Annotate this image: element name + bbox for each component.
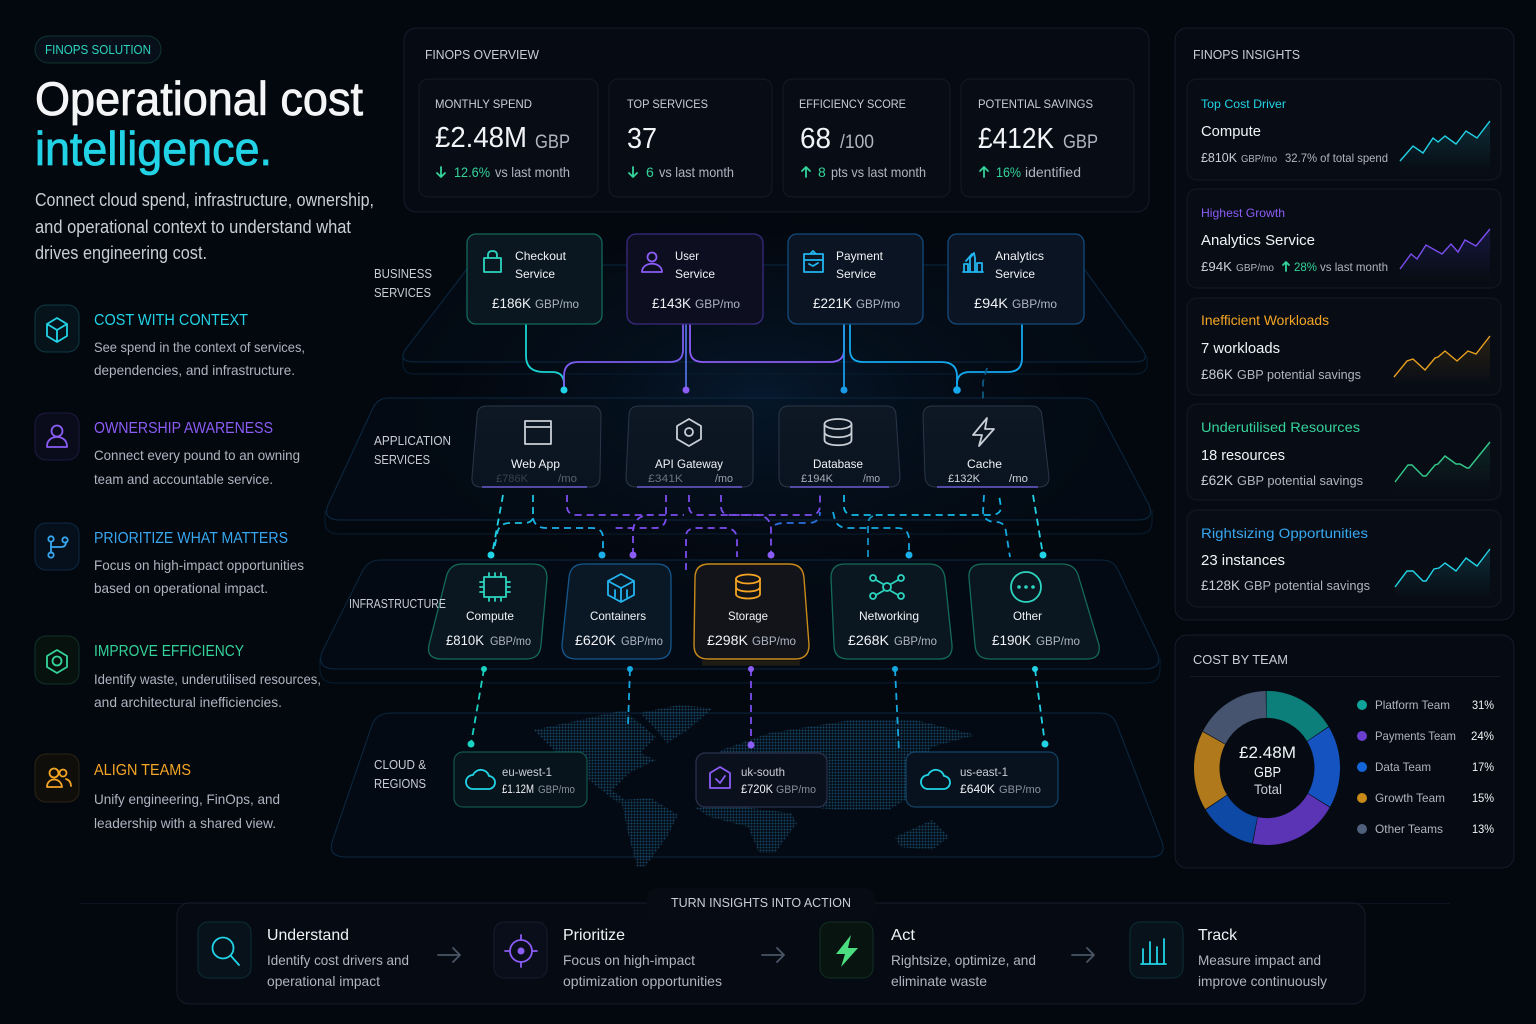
service card: user: £143K [652,295,692,311]
insight: inefficient workloads [1187,298,1501,395]
service card: user: GBP/mo [695,297,740,311]
kpi: top services: TOP SERVICES [627,97,708,111]
feature: prioritize what matters: based on operational impact. [94,580,268,596]
kpi: monthly spend: vs last month [495,164,570,180]
region card: uk-south: GBP/mo [776,784,816,796]
action heading pill: TURN INSIGHTS INTO ACTION [671,895,851,910]
feature: prioritize what matters: PRIORITIZE WHAT MATTERS [94,530,288,547]
infrastructure card: other: £190K [992,632,1032,648]
feature: improve efficiency: and architectural inefficiencies. [94,694,282,710]
infrastructure card: other: GBP/mo [1036,634,1080,648]
insight: inefficient workloads: 7 workloads [1201,340,1280,357]
infrastructure card: containers: Containers [590,609,646,623]
donut legend: 31% [1472,698,1494,712]
insight: top cost driver: GBP/mo [1241,153,1277,165]
platform: infrastructure layer [320,560,1160,683]
kpi: potential savings: identified [1025,164,1081,180]
infrastructure card: containers: GBP/mo [621,634,663,648]
application card: web app: /mo [558,473,577,485]
application card: cache [923,406,1049,487]
application card: api gateway: £341K [648,473,684,485]
kpi: potential savings: 16% [996,164,1021,180]
insight: rightsizing opportunities: £128K [1201,577,1241,593]
infrastructure card: networking: Networking [859,609,919,623]
infrastructure card: containers: £620K [575,632,617,648]
feature: align teams [35,754,280,831]
header: badge, title and intro: Connect cloud spend, infrastructure, ownership, [35,190,374,210]
insight: highest growth [1187,189,1501,288]
infrastructure card: other: Other [1013,609,1042,623]
step: track: improve continuously [1198,973,1327,989]
region card: uk-south [696,753,827,807]
layer labels: APPLICATION [374,434,451,448]
infrastructure card: storage [694,564,809,663]
region card: us-east-1: £640K [960,782,995,796]
application card: cache: /mo [1009,473,1028,485]
application card: database: Database [813,457,863,471]
service card: checkout: £186K [492,295,532,311]
infrastructure card: storage: Storage [728,609,768,623]
step: act [820,922,1036,989]
donut legend: Data Team [1375,760,1431,774]
service card: checkout [467,234,602,324]
service card: payment [788,234,923,324]
infrastructure card: other [969,564,1099,659]
platform: business services layer [403,265,1147,374]
step: understand: operational impact [267,973,380,989]
step: prioritize: optimization opportunities [563,973,722,989]
layer labels: BUSINESS [374,267,432,281]
insight: underutilised resources: 18 resources [1201,447,1285,464]
panel: cost by team [1175,635,1514,868]
arrow [1072,948,1094,962]
step: prioritize: Prioritize [563,927,625,944]
feature: improve efficiency: Identify waste, underutilised resources, [94,671,321,687]
infrastructure card: compute: Compute [466,609,514,623]
feature: align teams: leadership with a shared view. [94,815,276,831]
feature: align teams: ALIGN TEAMS [94,762,191,779]
infrastructure card: containers [562,564,671,659]
feature: ownership awareness: Connect every pound to an owning [94,447,300,463]
insight: inefficient workloads: GBP potential savings [1237,367,1361,382]
region card: us-east-1: us-east-1 [960,765,1008,779]
feature: ownership awareness: team and accountable service. [94,471,273,487]
arrow [438,948,460,962]
panel: cost by team: COST BY TEAM [1193,652,1288,667]
layer labels: CLOUD & [374,758,427,772]
platform: application services layer [325,398,1152,534]
application card: database [779,406,900,487]
application card: web app [472,406,601,487]
insight: highest growth: vs last month [1320,260,1388,274]
insight: highest growth: £94K [1201,259,1232,274]
step: prioritize [494,922,722,989]
kpi: top services: 6 [646,164,654,180]
service card: user: User [675,249,699,263]
application card: web app: Web App [511,457,560,471]
kpi: monthly spend: 12.6% [454,164,490,180]
step: act: Act [891,927,916,944]
donut centre total [1239,743,1296,797]
infrastructure card: storage: £298K [707,632,749,648]
insight: top cost driver: £810K [1201,150,1237,165]
step: prioritize: Focus on high-impact [563,952,695,968]
platform: cloud and regions layer [331,713,1163,857]
region card: us-east-1 [906,752,1058,807]
service card: analytics: Service [995,267,1035,281]
layer labels: REGIONS [374,777,426,791]
insight: top cost driver: Compute [1201,123,1261,140]
header: badge, title and intro [35,36,374,263]
infrastructure card: compute: GBP/mo [490,634,531,648]
kpi: efficiency score: pts vs last month [831,164,926,180]
donut legend: Other Teams [1375,822,1443,836]
region card: eu-west-1 [454,752,587,807]
feature: prioritize what matters [35,523,304,596]
insight: underutilised resources: GBP potential savings [1237,473,1363,488]
region card: eu-west-1: GBP/mo [538,784,575,796]
kpi: potential savings: GBP [1063,132,1098,153]
step: understand: Identify cost drivers and [267,952,409,968]
header: badge, title and intro: and operational context to understand what [35,217,351,237]
insight: rightsizing opportunities: GBP potential savings [1244,578,1370,593]
infrastructure card: networking: £268K [848,632,890,648]
service card: analytics: £94K [974,295,1009,311]
kpi: efficiency score: 8 [818,164,826,180]
donut legend: 13% [1472,822,1494,836]
insight: highest growth: 28% [1294,260,1317,274]
step: understand [198,922,409,989]
application card: cache: £132K [948,473,981,485]
infrastructure card: storage: GBP/mo [752,634,796,648]
insight: top cost driver: 32.7% of total spend [1285,151,1388,165]
application card: database: £194K [801,473,834,485]
infrastructure card: networking: GBP/mo [894,634,937,648]
step: understand: Understand [267,927,349,944]
service card: analytics: Analytics [995,249,1044,263]
service card: checkout: Checkout [515,249,567,263]
kpi: potential savings: £412K [978,123,1055,155]
header: badge, title and intro: drives engineering cost. [35,243,207,263]
kpi: monthly spend: GBP [535,132,570,153]
donut legend: Growth Team [1375,791,1445,805]
feature: improve efficiency: IMPROVE EFFICIENCY [94,643,244,660]
feature: improve efficiency [35,636,321,710]
panel: finops insights [1175,28,1514,620]
kpi: potential savings: POTENTIAL SAVINGS [978,97,1093,111]
feature: prioritize what matters: Focus on high-impact opportunities [94,557,304,573]
arrow [762,948,784,962]
step: track: Measure impact and [1198,952,1321,968]
region card: uk-south: £720K [741,782,773,796]
action bar: turn insights into action [177,888,1365,1004]
insight: inefficient workloads: £86K [1201,366,1234,382]
feature: ownership awareness: OWNERSHIP AWARENESS [94,420,273,437]
service card: analytics: GBP/mo [1012,297,1057,311]
kpi: monthly spend: MONTHLY SPEND [435,97,532,111]
layer labels: INFRASTRUCTURE [349,597,446,611]
connectors: business to application [526,325,1022,403]
kpi: efficiency score: /100 [840,132,874,153]
kpi: monthly spend [419,79,598,197]
panel: finops insights: FINOPS INSIGHTS [1193,47,1300,62]
donut centre total: Total [1254,781,1282,797]
feature: cost with context: See spend in the context of services, [94,339,305,355]
service card: payment: Payment [836,249,884,263]
layer labels: SERVICES [374,453,430,467]
application card: api gateway: /mo [715,473,733,485]
kpi: top services: 37 [627,123,657,155]
region card: us-east-1: GBP/mo [999,784,1041,796]
donut centre total: GBP [1254,764,1281,781]
application card: api gateway: API Gateway [655,457,723,471]
kpi: top services: vs last month [659,164,734,180]
step: act: Rightsize, optimize, and [891,952,1036,968]
feature: cost with context: COST WITH CONTEXT [94,312,248,329]
infrastructure card: compute: £810K [446,632,485,648]
kpi: top services [609,79,772,197]
action heading pill [647,888,875,920]
region card: uk-south: uk-south [741,765,785,779]
donut legend: 15% [1472,791,1494,805]
insight: underutilised resources: Underutilised Resources [1201,419,1360,435]
insight: inefficient workloads: Inefficient Workloads [1201,312,1329,328]
feature: ownership awareness [35,413,300,487]
step: track [1130,922,1327,989]
header: badge, title and intro: FINOPS SOLUTION [45,42,151,57]
application card: database: /mo [863,473,880,485]
insight: highest growth: GBP/mo [1236,262,1274,274]
application card: cache: Cache [967,457,1002,471]
insight: underutilised resources [1187,404,1501,500]
layer labels [349,267,451,791]
service card: checkout: GBP/mo [535,297,579,311]
kpi: potential savings [961,79,1134,197]
insight: underutilised resources: £62K [1201,472,1234,488]
kpi: efficiency score: EFFICIENCY SCORE [799,97,906,111]
insight: rightsizing opportunities [1187,510,1501,607]
feature: cost with context: dependencies, and infrastructure. [94,362,295,378]
header: badge, title and intro: Operational cost [35,72,363,125]
world map [534,705,976,867]
insight: top cost driver [1187,79,1501,180]
insight: highest growth: Highest Growth [1201,206,1285,220]
kpi: monthly spend: £2.48M [435,122,527,154]
donut legend: Platform Team [1375,698,1450,712]
feature: align teams: Unify engineering, FinOps, and [94,791,280,807]
insight: top cost driver: Top Cost Driver [1201,97,1286,111]
service card: payment: GBP/mo [856,297,900,311]
insight: highest growth: Analytics Service [1201,232,1315,249]
service card: payment: Service [836,267,876,281]
feature: cost with context [35,305,305,378]
application card: api gateway [626,406,753,487]
service card: analytics [948,234,1084,324]
panel: finops overview [404,28,1149,212]
kpi: efficiency score [783,79,950,197]
service card: user [627,234,763,324]
donut chart [1207,704,1327,832]
service card: user: Service [675,267,715,281]
infrastructure card: networking [831,564,952,659]
kpi: efficiency score: 68 [800,123,831,155]
application card: web app: £786K [496,473,529,485]
donut legend [1357,698,1494,836]
insight: rightsizing opportunities: 23 instances [1201,552,1285,569]
step: act: eliminate waste [891,973,987,989]
donut legend: Payments Team [1375,729,1456,743]
insight: rightsizing opportunities: Rightsizing Opportunities [1201,525,1368,541]
header: badge, title and intro: intelligence. [35,122,272,175]
region card: eu-west-1: £1.12M [502,782,534,796]
donut legend: 17% [1472,760,1494,774]
service card: payment: £221K [813,295,853,311]
donut legend: 24% [1471,729,1494,743]
service card: checkout: Service [515,267,555,281]
panel: finops overview: FINOPS OVERVIEW [425,47,540,62]
connectors: infrastructure to regions [468,666,1048,752]
connectors: application to infrastructure [488,495,1046,570]
region card: eu-west-1: eu-west-1 [502,765,552,779]
donut centre total: £2.48M [1239,743,1296,762]
layer labels: SERVICES [374,286,431,300]
infrastructure card: compute [429,564,547,659]
step: track: Track [1198,927,1238,944]
